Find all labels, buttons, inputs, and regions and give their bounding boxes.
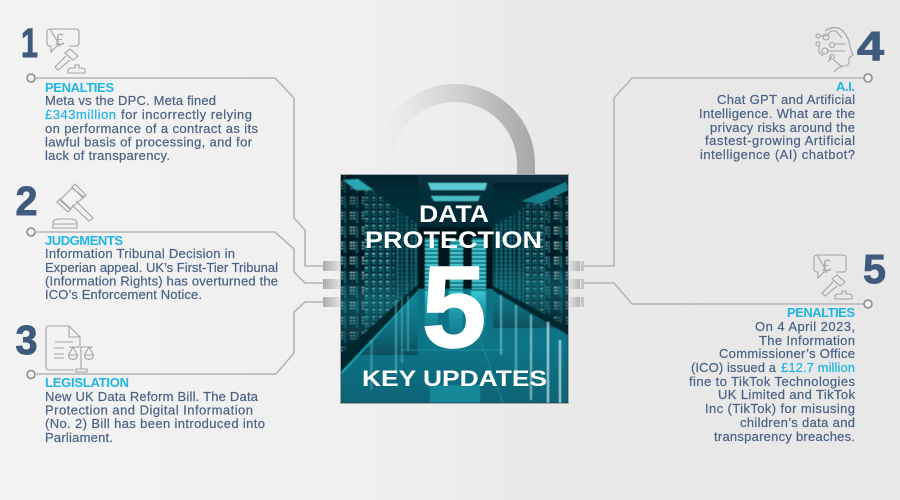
item 3: legislation [16, 317, 265, 445]
body text: Parliament. [45, 430, 113, 445]
padlock shackle [375, 84, 535, 176]
body text: Intelligence. What are the [699, 106, 855, 121]
body text: for incorrectly relying [121, 107, 252, 122]
connector line 3 [27, 302, 323, 378]
icon: AI head with circuits [816, 28, 853, 72]
body text [699, 92, 855, 162]
body text: The Information [759, 333, 855, 348]
item 1: penalties [21, 20, 258, 163]
number 5: 5 [863, 246, 886, 292]
heading: PENALTIES [787, 305, 855, 320]
body text: UK Limited and TikTok [718, 387, 856, 402]
body text: children’s data and [740, 415, 855, 430]
icon: speech bubble with pound and gavel: £ [55, 30, 65, 49]
connector line 4 [584, 74, 872, 266]
number 2: 2 [16, 178, 38, 224]
body text [45, 93, 258, 163]
lock title: Data Protection: PROTECTION [365, 227, 542, 254]
connector line 5 [584, 283, 872, 308]
heading: A.I. [836, 79, 855, 94]
icon: speech bubble with pound and gavel [47, 29, 85, 73]
connector line 2 [27, 228, 323, 283]
body text: fine to TikTok Technologies [689, 374, 856, 389]
body text [45, 389, 265, 445]
body text: (ICO) issued a [691, 360, 777, 375]
heading: PENALTIES [45, 80, 114, 95]
icon: speech bubble with pound and gavel: £ [822, 256, 832, 275]
padlock body: server room [340, 174, 568, 404]
body text: £343million [45, 107, 116, 122]
icon: gavel [53, 184, 93, 228]
body text: New UK Data Reform Bill. The Data [45, 389, 259, 404]
body text: Inc (TikTok) for misusing [705, 401, 855, 416]
body text: Information Tribunal Decision in [45, 246, 235, 261]
body text: £12.7 million [781, 360, 855, 375]
body text: transparency breaches. [714, 429, 855, 444]
body text: Protection and Digital Information [45, 402, 253, 418]
lock title: Data Protection: DATA [419, 201, 489, 228]
body text: Experian appeal. UK’s First-Tier Tribunal [45, 260, 278, 275]
body text [45, 246, 278, 302]
item 5: penalties [689, 246, 886, 444]
big number 5: 5 [422, 242, 486, 372]
connector line 1 [27, 74, 323, 266]
item 4: A.I. [699, 23, 884, 162]
body text: ICO’s Enforcement Notice. [45, 287, 202, 302]
body text: intelligence (AI) chatbot? [700, 147, 855, 162]
lock subtitle: Key Updates: KEY UPDATES [362, 366, 547, 391]
body text: Chat GPT and Artificial [717, 92, 855, 107]
connector tabs right [568, 261, 584, 307]
body text: privacy risks around the [710, 120, 855, 135]
heading: LEGISLATION [45, 375, 129, 390]
item 2: judgments [16, 178, 278, 302]
connector tabs left [323, 261, 341, 307]
number 4: 4 [857, 23, 884, 69]
icon: document with scales [46, 326, 94, 372]
lock title: Data Protection [365, 201, 542, 254]
body text: fastest-growing Artificial [705, 133, 855, 148]
heading: JUDGMENTS [45, 233, 123, 248]
body text: Commissioner’s Office [719, 346, 855, 361]
body text: lack of transparency. [45, 148, 170, 163]
icon: speech bubble with pound and gavel [814, 255, 852, 299]
number 1: 1 [21, 20, 38, 66]
body text: lawful basis of processing, and for [45, 134, 253, 150]
body text: Meta vs the DPC. Meta fined [45, 93, 216, 108]
body text: (Information Rights) has overturned the [45, 274, 278, 288]
number 3: 3 [16, 317, 38, 363]
body text: On 4 April 2023, [755, 319, 855, 334]
body text [689, 319, 856, 444]
body text: on performance of a contract as its [45, 121, 258, 136]
body text: (No. 2) Bill has been introduced into [45, 416, 265, 431]
